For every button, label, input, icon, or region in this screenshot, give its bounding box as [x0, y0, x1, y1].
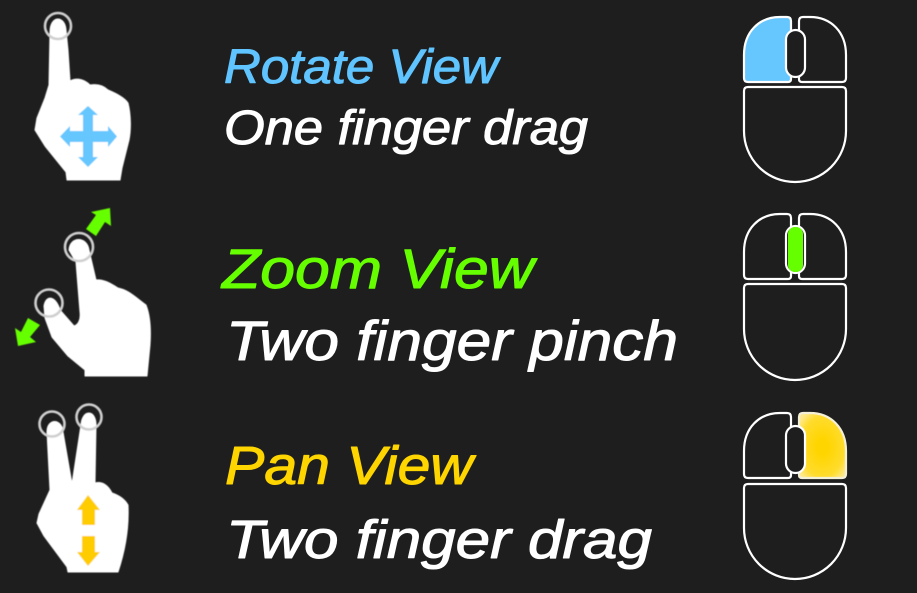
panel: pan view	[37, 404, 846, 579]
icon: two finger drag hand with arrows	[37, 404, 128, 572]
text: two finger pinch: Two finger pinch	[226, 309, 678, 372]
icon: one finger hand with move arrows	[35, 13, 130, 180]
heading: rotate view: Rotate View	[224, 41, 502, 94]
panel: rotate view	[35, 13, 846, 182]
icon: mouse with left button highlighted	[744, 17, 846, 182]
icon: mouse with right button highlighted	[744, 413, 846, 579]
heading: pan view: Pan View	[225, 436, 476, 496]
icon: mouse with wheel highlighted	[744, 214, 846, 380]
text: two finger drag: Two finger drag	[226, 510, 652, 570]
icon: two finger pinch hand with arrows	[15, 208, 150, 376]
panel: zoom view	[15, 208, 846, 380]
heading: zoom view: Zoom View	[220, 237, 538, 300]
text: one finger drag: One finger drag	[224, 102, 588, 155]
